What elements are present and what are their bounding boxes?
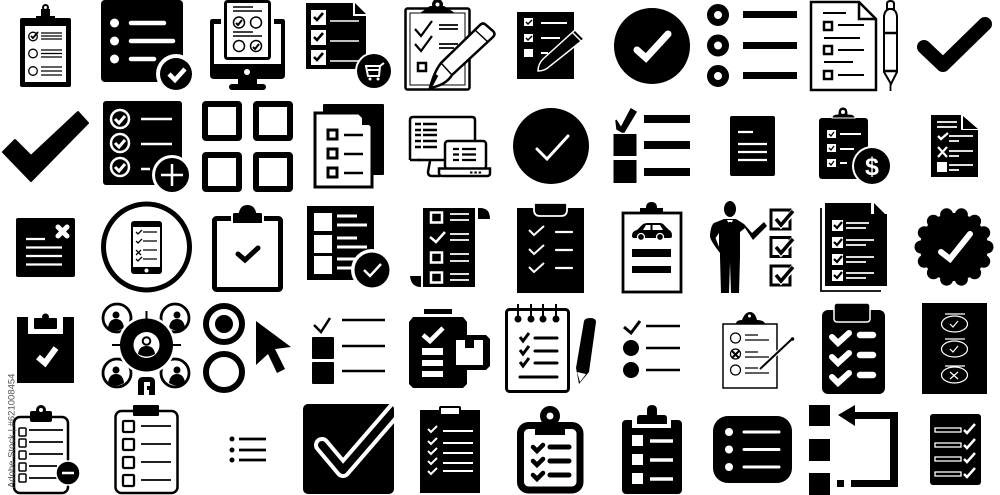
icon: small dotted list xyxy=(230,436,266,462)
icon: card with cross xyxy=(16,218,75,277)
icon: clipboard with box xyxy=(409,309,490,388)
icon: spiral notepad with pencil xyxy=(506,304,596,392)
icon: pencil on checklist xyxy=(517,12,584,79)
icon: stock id vertical text: Adobe Stock | #621008454 xyxy=(6,374,18,488)
icon: black card with hand drawn circles xyxy=(922,303,987,394)
icon: outlined clipboard list xyxy=(116,405,178,493)
icon: clipboard with dollar badge xyxy=(819,107,892,186)
icon: radio buttons with cursor xyxy=(206,306,291,390)
icon: stacked checklist pages xyxy=(821,203,887,291)
icon: clipboard three checks xyxy=(517,203,584,293)
icon: form clipboard with pen xyxy=(723,312,794,388)
icon: four squares xyxy=(205,104,290,189)
icon: table list with check badge xyxy=(307,206,393,291)
icon: list with check badge xyxy=(101,0,196,94)
icon: black list with checks xyxy=(930,414,981,485)
icon: check in black square xyxy=(303,404,400,494)
icon: clipboard with pencil xyxy=(406,0,494,90)
icon: clipboard with dollar badge: $ xyxy=(865,153,879,181)
icon: rounded list card xyxy=(713,416,792,483)
icon: rounded clipboard heart checks xyxy=(520,406,580,490)
icon: clipboard five checks xyxy=(420,407,480,493)
icon: clipboard outline check xyxy=(214,204,280,290)
icon: scalloped badge check xyxy=(914,208,994,286)
icon: check and dots list xyxy=(623,321,680,378)
icon: clipboard with minus badge xyxy=(14,405,80,493)
icon: monitor with tablet form xyxy=(210,0,285,90)
icon: solid clipboard list xyxy=(622,405,682,494)
icon: clipboard solid check xyxy=(17,314,74,383)
icon: document and pen xyxy=(811,1,897,91)
icon: people network xyxy=(103,304,189,395)
icon: small clipboard xyxy=(20,4,71,87)
icon: clipboard with car xyxy=(623,202,681,292)
icon: thin check list xyxy=(312,318,385,384)
icon: document with check and cross xyxy=(931,115,978,177)
icon: radio list xyxy=(710,8,797,84)
icon: arrow flow squares xyxy=(809,405,898,495)
icon: phone checklist in circle xyxy=(104,204,190,290)
icon: checklist with plus badge xyxy=(103,101,192,195)
icon: desktop and laptop xyxy=(410,117,490,176)
icon: stacked checklist documents xyxy=(315,104,384,187)
icon: text document xyxy=(730,116,775,176)
icon: circle check xyxy=(614,8,690,84)
icon: check block list xyxy=(614,109,690,183)
icon: checklist document with cart xyxy=(306,3,393,90)
icon: circle thin check xyxy=(513,108,589,184)
icon: scroll checklist xyxy=(410,208,490,287)
icon: check mark xyxy=(924,24,985,65)
icon: businessman with check boxes xyxy=(710,201,794,293)
icon: clipboard bold checks xyxy=(822,303,885,394)
icon: large check mark xyxy=(3,112,88,181)
